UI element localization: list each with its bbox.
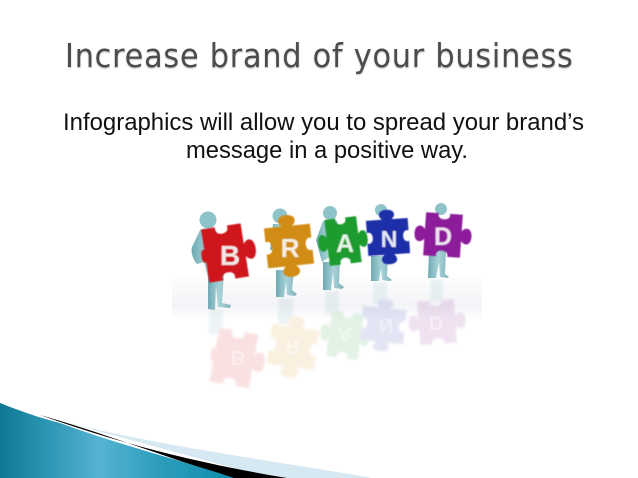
puzzle piece N [365, 208, 411, 266]
puzzle piece R: R [281, 233, 300, 263]
brand illustration [172, 203, 482, 390]
puzzle piece A [316, 215, 370, 267]
person B [192, 212, 231, 310]
brand illustration: R [286, 335, 301, 357]
title: Increase brand of your business [65, 39, 573, 76]
puzzle piece B: B [220, 240, 240, 271]
puzzle piece N: N [381, 226, 397, 252]
body text [63, 109, 584, 164]
floor shadow [172, 272, 482, 320]
swoosh: pale blue band [50, 418, 372, 478]
corner swoosh [0, 403, 372, 478]
puzzle piece D: D [434, 223, 452, 251]
swoosh: black band [40, 415, 287, 478]
brand illustration: A [338, 323, 352, 345]
body text: Infographics will allow you to spread your brand’s [63, 109, 584, 136]
puzzle piece B [197, 222, 260, 283]
brand illustration: D [429, 311, 443, 333]
puzzle piece A: A [336, 230, 354, 258]
swoosh: teal band [0, 403, 234, 478]
puzzle piece R [263, 213, 315, 279]
person A [316, 206, 344, 290]
person N [371, 204, 392, 281]
puzzle piece D [413, 212, 473, 258]
person R [270, 208, 297, 297]
brand illustration: B [231, 346, 245, 368]
body text: message in a positive way. [186, 137, 468, 164]
person D [428, 203, 449, 278]
reflection of puzzle people [206, 279, 467, 390]
title: Increase brand of your business [65, 38, 573, 75]
brand illustration: N [379, 314, 393, 336]
